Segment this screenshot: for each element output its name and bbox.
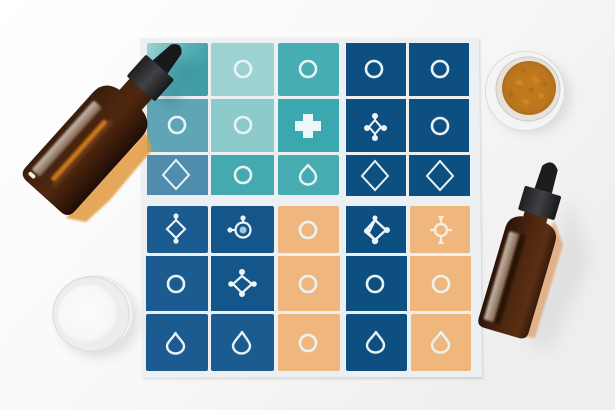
jar: white cream [53, 276, 139, 358]
icon: star diamond nodes [228, 269, 257, 297]
bottle shadows and amber glow [66, 55, 590, 350]
bottle: amber dropper right [476, 155, 576, 340]
panel: peach column right [410, 206, 471, 371]
icon: diamond with nodes [167, 213, 185, 244]
icon: cross [295, 114, 321, 138]
panel: teal block [147, 43, 339, 195]
panel: blue block bottom left [146, 206, 274, 371]
icon: molecule peach [430, 216, 452, 244]
icon: ring with nodes [227, 215, 250, 238]
panel: navy column bottom [346, 206, 407, 371]
icon: node cluster navy [364, 113, 387, 141]
panel: navy block top right [346, 43, 470, 196]
icons: circles [168, 61, 449, 351]
icons: droplets [167, 165, 449, 354]
bottle: amber dropper left [19, 24, 204, 219]
jar: amber balm [486, 52, 571, 134]
paper sheet [140, 38, 483, 379]
icon: molecule navy [364, 216, 390, 244]
panel: peach column [278, 206, 340, 371]
icons: diamonds [163, 160, 453, 190]
